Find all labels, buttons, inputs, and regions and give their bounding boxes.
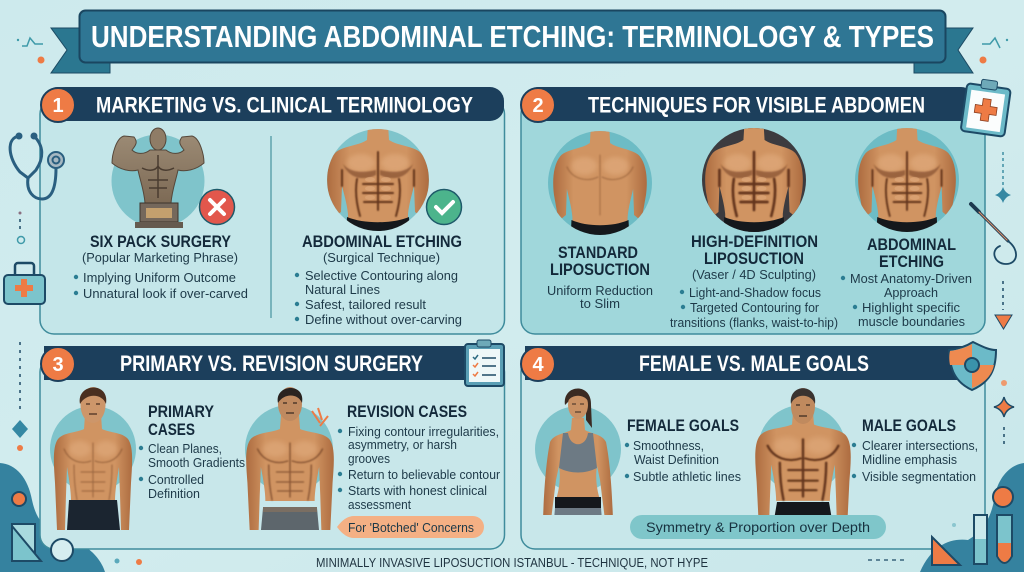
panel 3 heading: PRIMARY VS. REVISION SURGERY [120,351,423,376]
icon: checklist clipboard [465,340,504,386]
icon: cannula instrument [971,204,1016,264]
text: abdominal etching: (Surgical Technique) [323,250,440,265]
panel 3 header bar [44,346,494,380]
text: male goals [852,417,978,484]
text: male goals: Clearer intersections, [862,438,978,453]
callout: botched concerns [337,516,484,538]
panel 1: marketing vs clinical terminology [40,87,504,334]
panel 4 heading: FEMALE VS. MALE GOALS [639,351,869,376]
text: primary cases: Definition [148,486,200,501]
text: high-definition liposuction: Light-and-Shadow focus [689,285,821,300]
text: revision cases [338,403,501,512]
icon: clipboard with cross [961,77,1012,137]
text: abdominal etching: Define without over-carving [305,312,462,327]
figure: revision case man [245,387,334,530]
text: abdominal etching: Natural Lines [305,282,380,297]
callout: symmetry and proportion [630,515,886,539]
text: abdominal etching technique: ETCHING [879,253,944,271]
text: high-definition liposuction [670,233,838,330]
text: abdominal etching technique [841,236,972,329]
panel 4 frame [521,358,985,549]
icon: green check badge [426,190,462,224]
icon: stethoscope [10,134,64,199]
panel 4 number badge: 4 [532,354,544,376]
text: six pack surgery: Implying Uniform Outcome [83,270,236,285]
image: high-definition torso [702,124,806,236]
decoration: bottom-right corner [868,463,1024,572]
text: standard liposuction [547,244,653,311]
text: male goals: Midline emphasis [862,452,957,467]
text: standard liposuction: STANDARD [558,244,638,262]
text: standard liposuction: LIPOSUCTION [550,261,650,279]
panel 2 number badge: 2 [532,95,544,117]
panel 3 number badge [41,347,75,381]
image: abdominal etching torso [855,124,959,236]
panel 1 heading: MARKETING VS. CLINICAL TERMINOLOGY [96,92,473,118]
text: abdominal etching technique: Highlight specific [862,300,960,315]
panel 3 number badge: 3 [52,354,64,376]
text: female goals [625,417,741,484]
text: revision cases: Starts with honest clinical [348,483,487,498]
callout: botched concerns: For 'Botched' Concerns [348,520,474,535]
text: revision cases: Return to believable contour [348,467,501,482]
title banner [51,10,973,73]
text: primary cases: CASES [148,421,195,439]
divider [270,136,272,318]
callout: symmetry and proportion: Symmetry & Proportion over Depth [646,519,870,535]
text: revision cases: grooves [348,451,390,466]
text: revision cases: Fixing contour irregularities, [348,424,499,439]
text: high-definition liposuction: HIGH-DEFINITION [691,233,818,251]
text: six pack surgery: SIX PACK SURGERY [90,233,231,251]
panel 1 number badge [41,88,75,122]
image: etched abdomen [327,124,429,236]
panel 4 header bar [525,346,970,380]
text: high-definition liposuction: transitions (flanks, waist-to-hip) [670,315,838,330]
footer text: MINIMALLY INVASIVE LIPOSUCTION ISTANBUL - TECHNIQUE, NOT HYPE [316,555,708,570]
text: high-definition liposuction: Targeted Contouring for [690,300,820,315]
text: primary cases: Smooth Gradients [148,455,245,470]
text: abdominal etching technique: ABDOMINAL [867,236,956,254]
text: primary cases: PRIMARY [148,403,214,421]
text: high-definition liposuction: LIPOSUCTION [704,250,804,268]
text: six pack surgery: Unnatural look if over-carved [83,286,248,301]
text: abdominal etching: ABDOMINAL ETCHING [302,233,462,251]
image: standard liposuction torso [548,127,652,239]
text: revision cases: asymmetry, or harsh [348,437,457,452]
figure: female athlete [535,388,621,520]
icon: red cross badge [200,190,234,224]
figure: primary case man [50,387,136,530]
panel 1 number badge: 1 [52,95,64,117]
text: male goals: MALE GOALS [862,417,956,435]
text: high-definition liposuction: (Vaser / 4D Sculpting) [692,267,816,282]
banner bar [80,10,946,62]
text: abdominal etching technique: muscle boundaries [858,314,965,329]
panel 3 frame [40,358,504,549]
panel 2 heading: TECHNIQUES FOR VISIBLE ABDOMEN [588,92,925,118]
text: male goals: Visible segmentation [862,469,976,484]
image: trophy statue [112,128,204,228]
panel 2 number badge [521,88,555,122]
text: abdominal etching [295,233,462,327]
text: female goals: FEMALE GOALS [627,417,739,435]
text: female goals: Smoothness, [633,438,704,453]
icon: shield [949,342,996,390]
text: primary cases [139,403,245,501]
text: female goals: Waist Definition [634,452,719,467]
decoration: bottom-left shapes [12,492,142,565]
icon: medical case [4,263,45,304]
text: six pack surgery [74,233,248,301]
text: abdominal etching technique: Approach [884,285,938,300]
text: abdominal etching: Selective Contouring along [305,268,458,283]
text: revision cases: REVISION CASES [347,403,467,421]
panel 2 header bar [525,87,975,121]
text: abdominal etching: Safest, tailored result [305,297,426,312]
figure: muscular man [755,388,851,515]
decoration: small pulse marks and dots [12,38,1014,451]
panel 1 header bar [44,87,504,121]
panel 4 number badge [521,347,555,381]
text: revision cases: assessment [348,497,411,512]
panel 2: techniques for visible abdomen [521,87,985,334]
ribbon tails [51,28,973,73]
panel 3: primary vs revision surgery [40,346,504,549]
text: primary cases: Controlled [148,472,204,487]
text: abdominal etching technique: Most Anatomy-Driven [850,271,972,286]
text: female goals: Subtle athletic lines [633,469,741,484]
text: six pack surgery: (Popular Marketing Phrase) [82,250,238,265]
panel 2 frame [521,100,985,334]
text: primary cases: Clean Planes, [148,441,222,456]
text: standard liposuction: to Slim [580,296,620,311]
panel 1 frame [40,100,504,334]
panel 4: female vs male goals [521,346,985,549]
decoration: bottom-left blob [0,463,105,572]
text: standard liposuction: Uniform Reduction [547,283,653,298]
